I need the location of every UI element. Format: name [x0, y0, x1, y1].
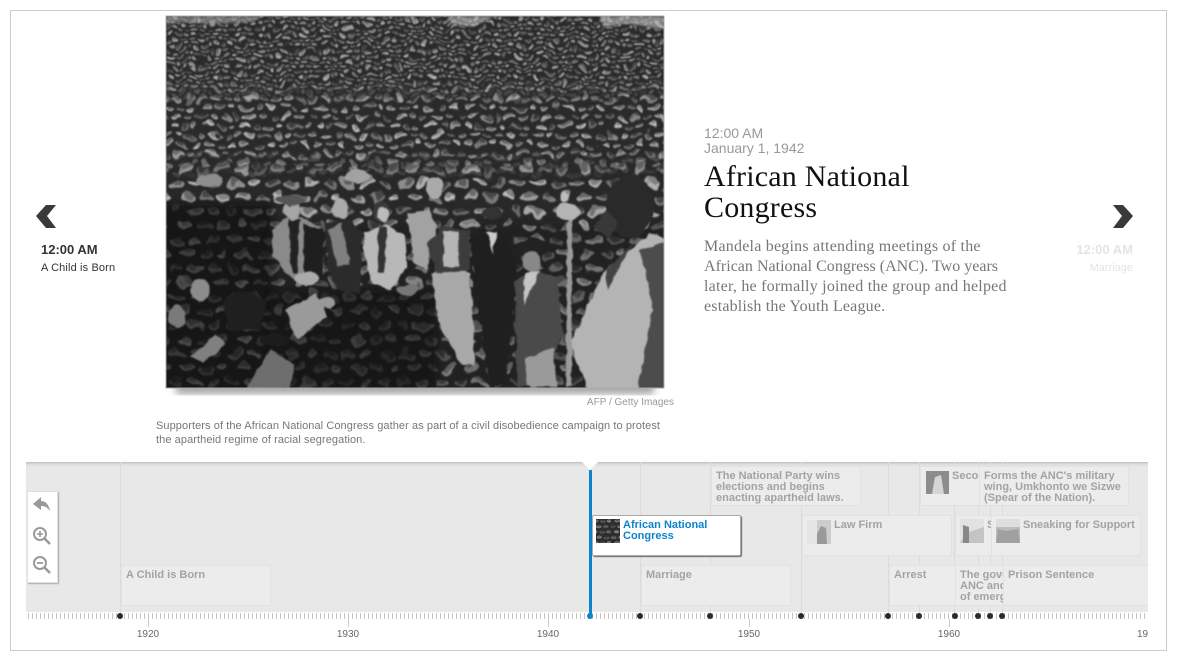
icon: zoom in	[33, 527, 51, 545]
card: Sneaking for Support: Sneaking for Support	[1023, 519, 1135, 531]
card: Marriage	[641, 565, 791, 606]
timeline band	[26, 462, 1148, 612]
photo caption: the apartheid regime of racial segregation.	[156, 434, 366, 446]
previous event label: 12:00 AM	[41, 242, 98, 257]
card: National Party: enacting apartheid laws.	[716, 492, 844, 504]
card: Forms the ANC wing: (Spear of the Nation).	[984, 492, 1095, 504]
event dots	[117, 613, 1005, 619]
year labels: 1940	[537, 629, 559, 640]
photo shadow	[176, 382, 654, 394]
year labels: 1920	[137, 629, 159, 640]
year labels: 1930	[337, 629, 359, 640]
icon: zoom out	[33, 556, 51, 574]
next event label: 12:00 AM	[1076, 242, 1133, 257]
card: Prison Sentence: Prison Sentence	[1008, 569, 1094, 581]
event title: African National	[704, 160, 910, 193]
year labels: 1960	[938, 629, 960, 640]
card: Forms the ANC wing: wing, Umkhonto we Sizwe	[984, 481, 1121, 493]
card: Government bans	[955, 565, 1105, 606]
event description: African National Congress (ANC). Two years	[704, 258, 998, 275]
year labels: 1950	[738, 629, 760, 640]
year labels	[137, 629, 1148, 640]
event description	[704, 238, 1007, 315]
photo credit: AFP / Getty Images	[587, 397, 674, 408]
card: Arrest	[889, 565, 1039, 606]
event title	[704, 160, 910, 224]
card: Government bans: The government bans the	[960, 569, 1094, 581]
time axis	[28, 613, 1145, 627]
card: Arrest: Arrest	[894, 569, 926, 581]
card: Forms the ANC wing	[979, 466, 1129, 506]
card: Government bans: ANC and declares a state	[960, 580, 1092, 592]
card: Sneaking for Support	[991, 515, 1141, 556]
event description: establish the Youth League.	[704, 298, 885, 315]
zoom controls	[27, 491, 58, 583]
card: A Child is Born: A Child is Born	[126, 569, 205, 581]
event title: Congress	[704, 191, 817, 224]
current position pointer	[582, 462, 598, 470]
previous arrow	[36, 205, 56, 228]
event stems	[120, 462, 1003, 613]
active card thumbnail	[596, 519, 620, 543]
card: National Party	[711, 466, 861, 506]
card: Marriage: Marriage	[646, 569, 692, 581]
event time and date: 12:00 AM	[704, 125, 763, 141]
axis ticks	[28, 613, 1145, 627]
card: A Child is Born	[121, 565, 271, 606]
current position line	[589, 470, 592, 616]
photo caption	[156, 420, 660, 446]
photo caption: Supporters of the African National Congress gather as part of a civil disobedience campaign to protest	[156, 420, 660, 432]
event description: later, he formally joined the group and helped	[704, 278, 1007, 295]
event time and date	[704, 125, 804, 156]
active card title: Congress	[623, 530, 674, 542]
active card title: African National	[623, 519, 707, 531]
previous event label: A Child is Born	[41, 262, 115, 274]
event time and date: January 1, 1942	[704, 140, 804, 156]
figures	[167, 169, 670, 393]
next event label: Marriage	[1090, 262, 1133, 274]
active card: African National Congress	[592, 515, 741, 556]
photo: crowd at ANC rally	[166, 16, 664, 396]
previous event label	[41, 242, 115, 274]
card: Sharpeville: Sharpeville	[987, 519, 1046, 531]
icon: back	[33, 497, 50, 511]
active card title	[623, 519, 707, 542]
card: Law Firm	[802, 515, 952, 556]
next event label	[1076, 242, 1133, 274]
card: Second trial	[920, 466, 1070, 506]
card: National Party: elections and begins	[716, 481, 825, 493]
card: Sharpeville	[955, 515, 1105, 556]
card: Government bans: of emergency	[960, 591, 1032, 603]
card: Law Firm: Law Firm	[834, 519, 882, 531]
next arrow	[1113, 205, 1133, 228]
card: Prison Sentence	[1003, 565, 1148, 606]
event description: Mandela begins attending meetings of the	[704, 238, 981, 255]
